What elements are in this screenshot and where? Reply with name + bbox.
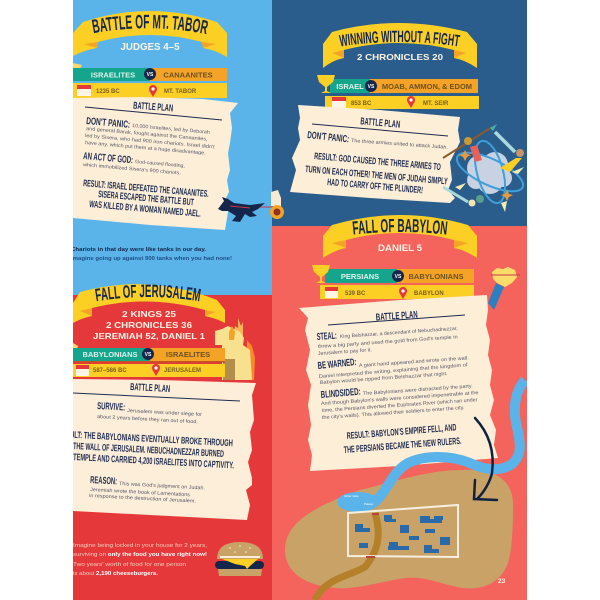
date and place bar: Jerusalem [73,364,225,377]
banner: Fall of Jerusalem [73,284,225,323]
matchup bar: Israelites vs Canaanites: VS [147,72,154,78]
parchment: Jerusalem battle plan: THE WALL OF JERUSALEM. NEBUCHADNEZZAR BURNED [73,441,224,460]
arrow: points to Babylon [474,418,497,500]
panel: Fall of Jerusalem background [73,295,272,600]
map: road [315,513,378,600]
matchup bar: Israel vs Moab, Ammon and Edom: VS [368,84,375,90]
map: Euphrates river: Ishtar Gate [344,494,359,498]
trivia: chariots: Chariots in that day were like tanks in our day. [71,247,207,253]
parchment: Jerusalem battle plan: TEMPLE AND CARRIED 4,200 ISRAELITES INTO CAPTIVITY. [73,452,234,471]
scripture references: Fall of Jerusalem [93,309,205,341]
date and place bar: Mt. Tabor [73,83,227,98]
date and place bar: Mt. Tabor: 1235 BC [96,89,120,95]
trivia: chariots: Imagine going up against 900 tanks when you had none! [71,256,232,262]
banner: Battle of Mt. Tabor [73,11,227,57]
parchment: Winning Without a Fight battle plan [290,105,460,203]
banner: Battle of Mt. Tabor: JUDGES 4–5 [120,42,180,53]
date and place bar: Babylon: 539 BC [345,291,366,297]
icon: trophy Babylonians [73,343,78,348]
matchup bar: Babylonians vs Israelites: BABYLONIANS [82,350,138,359]
parchment: Babylon battle plan: BLINDSIDED: [320,387,361,401]
scripture references: Fall of Jerusalem: 2 KINGS 25 [122,309,176,319]
parchment: Mt. Tabor battle plan: RESULT: ISRAEL DEFEATED THE CANAANITES. [83,178,209,200]
parchment: Babylon battle plan: STEAL: [316,331,337,343]
date and place bar: Mt. Seir: MT. SEIR [423,101,449,107]
date and place bar: Babylon [320,285,474,299]
banner: Winning Without a Fight [323,23,477,68]
parchment: Babylon battle plan: the city's walls). This allowed their soldiers to enter the city. [322,405,465,421]
trivia: cheeseburgers: is about 2,190 cheeseburgers. [73,571,159,577]
parchment: Winning Without a Fight battle plan: The three armies united to attack Judah. [351,138,448,151]
parchment: Babylon battle plan: King Belshazzar, a descendant of Nebuchadnezzar, [340,326,458,340]
scripture references: Fall of Jerusalem: JEREMIAH 52, DANIEL 1 [93,331,205,341]
parchment: Jerusalem battle plan: SURVIVE: [97,401,125,413]
parchment: Babylon battle plan: RESULT: BABYLON'S EMPIRE FELL, AND [346,422,457,442]
parchment: Mt. Tabor battle plan: led by Sisera, who had 900 iron chariots. Israel didn't [85,133,216,150]
parchment: Mt. Tabor battle plan: BATTLE PLAN [133,101,174,114]
map: walled city of Babylon [348,505,458,558]
parchment: Jerusalem battle plan: about 2 years before they ran out of food. [97,414,198,425]
banner: Fall of Jerusalem: FALL OF JERUSALEM [94,284,201,302]
matchup bar: Persians vs Babylonians: PERSIANS [341,272,379,281]
parchment: Jerusalem battle plan: in response to the destruction of Jerusalem. [89,493,196,505]
parchment: Babylon battle plan: Babylon would be ripped from Belshazzar that night. [320,371,448,386]
parchment: Mt. Tabor battle plan: WAS KILLED BY A WOMAN NAMED JAEL. [89,199,201,220]
map: Euphrates river: Palace [364,502,374,506]
icon: chariot rider and wheel [270,190,284,219]
trivia: cheeseburgers: Two years' worth of food for one person [73,562,186,568]
parchment: Mt. Tabor battle plan: God-caused flooding, [135,159,185,169]
icon: trophy Israelites [73,63,82,68]
banner: Fall of Babylon: DANIEL 5 [378,243,423,254]
parchment: Babylon battle plan: THE PERSIANS BECAME THE NEW RULERS. [343,436,462,456]
panel: Battle of Mt. Tabor background [73,0,272,295]
parchment: Jerusalem battle plan: BATTLE PLAN [130,382,170,395]
parchment: Mt. Tabor battle plan: AN ACT OF GOD: [83,151,134,166]
banner: Battle of Mt. Tabor: BATTLE OF MT. TABOR [92,14,208,34]
parchment: Babylon battle plan: BATTLE PLAN [375,310,418,323]
parchment: Winning Without a Fight battle plan: HAD TO CARRY OFF THE PLUNDER! [327,177,423,196]
trivia: cheeseburgers: surviving on only the food you have right now! [73,552,207,558]
parchment: Mt. Tabor battle plan: SISERA ESCAPED THE BATTLE BUT [98,189,194,208]
icon: hand writing on the wall [488,267,520,310]
icon: horse pulling chariot [218,197,272,222]
matchup bar: Israel vs Moab, Ammon and Edom: ISRAEL [336,82,364,91]
trivia: cheeseburgers [73,543,208,577]
banner: Winning Without a Fight: WINNING WITHOUT A FIGHT [338,30,460,46]
matchup bar: Babylonians vs Israelites: ISRAELITES [166,350,210,359]
matchup bar: Israel vs Moab, Ammon and Edom [330,79,478,93]
date and place bar: Mt. Tabor: MT. TABOR [164,89,197,95]
parchment: Babylon battle plan: threw a big party and used the gold from God's temple in [318,334,458,350]
parchment: Jerusalem battle plan [58,379,256,520]
matchup bar: Israelites vs Canaanites: ISRAELITES [91,70,135,80]
icon: cheeseburger [215,542,264,576]
matchup bar: Israelites vs Canaanites: CANAANITES [163,70,213,80]
icon: trophy Israel [317,75,335,93]
banner: Fall of Babylon [323,215,477,258]
icon: burning city wall [215,318,255,380]
parchment: Mt. Tabor battle plan: which immobilized Sisera's 900 chariots. [83,162,181,177]
panel: Fall of Babylon background [272,226,527,600]
parchment: Babylon battle plan [299,295,498,471]
parchment: Winning Without a Fight battle plan: DON'T PANIC: [307,130,350,145]
parchment: Babylon battle plan: And though Babylon's walls were considered impenetrable at the [321,390,479,407]
date and place bar: Mt. Seir [325,96,479,109]
date and place bar: Jerusalem: JERUSALEM [164,368,201,374]
parchment: Winning Without a Fight battle plan: TURN ON EACH OTHER! THE MEN OF JUDAH SIMPLY [305,164,449,187]
illustration: battling armies dust cloud with weapons [443,124,528,212]
map: land of Babylon [285,470,513,588]
parchment: Mt. Tabor battle plan: 10,000 Israelites, led by Deborah [132,123,210,136]
date and place bar: Babylon: BABYLON [414,291,444,297]
map: Euphrates river [337,380,525,512]
matchup bar: Israelites vs Canaanites [73,68,227,81]
trivia: cheeseburgers: Imagine being locked in your house for 2 years, [73,543,208,549]
panel: Winning Without a Fight background [272,0,527,226]
parchment: Jerusalem battle plan: Jerusalem was under siege for [127,408,202,418]
trivia: chariots [71,247,232,262]
parchment: Babylon battle plan: Jerusalem to pay for it. [318,347,372,357]
matchup bar: Persians vs Babylonians: BABYLONIANS [408,272,464,281]
scripture references: Fall of Jerusalem: 2 CHRONICLES 36 [106,320,192,330]
parchment: Jerusalem battle plan: RESULT: THE BABYLONIANS EVENTUALLY BROKE THROUGH [58,429,233,449]
parchment: Babylon battle plan: time, the Persians diverted the Euphrates River (which ran under [322,397,478,414]
parchment: Winning Without a Fight battle plan: BATTLE PLAN [360,116,401,131]
parchment: Jerusalem battle plan: REASON: [90,475,117,487]
parchment: Jerusalem battle plan: Jeremiah wrote the book of Lamentations [90,487,191,498]
parchment: Mt. Tabor battle plan [73,97,238,230]
date and place bar: Mt. Seir: 853 BC [351,101,372,107]
parchment: Mt. Tabor battle plan: DON'T PANIC: [86,116,131,131]
matchup bar: Persians vs Babylonians: VS [395,274,402,280]
parchment: Winning Without a Fight battle plan: RESULT: GOD CAUSED THE THREE ARMIES TO [314,151,441,173]
parchment: Babylon battle plan: The Babylonians were distracted by the party. [363,383,473,397]
parchment: Babylon battle plan: Daniel interpreted the writing, explaining that the kingdom of [319,362,468,380]
matchup bar: Persians vs Babylonians [325,269,474,283]
matchup bar: Babylonians vs Israelites [73,348,225,362]
parchment: Babylon battle plan: BE WARNED: [317,357,357,372]
banner: Winning Without a Fight: 2 CHRONICLES 20 [357,52,443,62]
banner: Fall of Babylon: FALL OF BABYLON [352,218,448,234]
date and place bar: Jerusalem: 587–586 BC [93,368,127,374]
parchment: Jerusalem battle plan: This was God's judgment on Judah. [119,481,205,491]
matchup bar: Babylonians vs Israelites: VS [145,352,152,358]
parchment: Babylon battle plan: A giant hand appeared and wrote on the wall. [359,355,469,369]
parchment: Mt. Tabor battle plan: and general Barak, fought against the Canaanites, [86,126,208,143]
parchment: Mt. Tabor battle plan: have any, which put them at a huge disadvantage. [85,140,206,157]
icon: trophy Persians [312,265,330,283]
matchup bar: Israel vs Moab, Ammon and Edom: MOAB, AMMON, & EDOM [382,82,472,91]
page number: 23 [498,578,506,585]
